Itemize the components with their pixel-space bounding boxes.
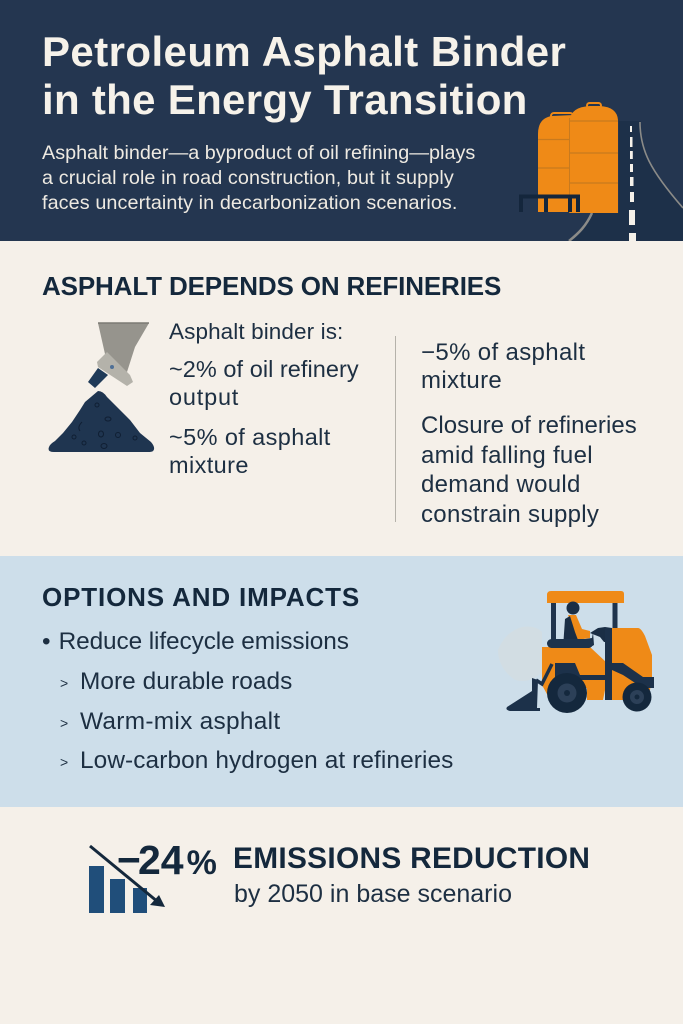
panel: asphalt depends on refineries: [0, 241, 683, 556]
right text block: demand would: [421, 471, 581, 498]
icon: funnel and asphalt pile: [48, 322, 154, 452]
bullet list: • Reduce lifecycle emissions: [42, 628, 349, 655]
right text block: Closure of refineries: [421, 412, 637, 439]
stat value: −24%: [117, 837, 217, 883]
stat: refinery output: [169, 356, 359, 410]
stat: refinery output: ~2% of oil refinery: [169, 356, 359, 382]
panel: emissions reduction: [0, 807, 683, 1024]
right stat: [421, 339, 585, 394]
sub-item: >: [60, 715, 68, 731]
stat: asphalt mixture: [169, 424, 331, 478]
icon: paver vehicle: [506, 591, 654, 713]
right text block: amid falling fuel: [421, 442, 593, 468]
right text block: constrain supply: [421, 500, 599, 528]
heading: ASPHALT DEPENDS ON REFINERIES: [42, 271, 501, 301]
panel: options and impacts: [0, 556, 683, 807]
stat: asphalt mixture: ~5% of asphalt: [169, 424, 331, 450]
sub-item: Low-carbon hydrogen at refineries: [80, 747, 453, 774]
sub-item: Warm-mix asphalt: [80, 708, 280, 735]
right stat: mixture: [421, 367, 502, 394]
stat heading: EMISSIONS REDUCTION: [233, 842, 590, 875]
intro text: Asphalt binder—a byproduct of oil refining—plays: [42, 142, 475, 164]
stat description: by 2050 in base scenario: [234, 880, 512, 908]
sub-item: >: [60, 754, 68, 770]
title: [42, 28, 566, 123]
intro text: a crucial role in road construction, but it supply: [42, 167, 454, 189]
left text block: Asphalt binder is:: [169, 319, 343, 344]
icon: declining bar chart: [89, 844, 165, 913]
sub-item: More durable roads: [80, 668, 292, 695]
title: in the Energy Transition: [42, 76, 528, 123]
heading: OPTIONS AND IMPACTS: [42, 582, 360, 612]
sub-item: >: [60, 675, 68, 691]
right stat: −5% of asphalt: [421, 339, 585, 366]
title: Petroleum Asphalt Binder: [42, 28, 566, 75]
header panel: [0, 0, 683, 241]
icon: storage tanks and road: [519, 102, 683, 241]
stat: asphalt mixture: mixture: [169, 452, 249, 478]
intro text: faces uncertainty in decarbonization scenarios.: [42, 192, 457, 214]
stat: refinery output: output: [169, 384, 239, 410]
intro text: [42, 142, 475, 214]
right text block: [421, 412, 637, 528]
